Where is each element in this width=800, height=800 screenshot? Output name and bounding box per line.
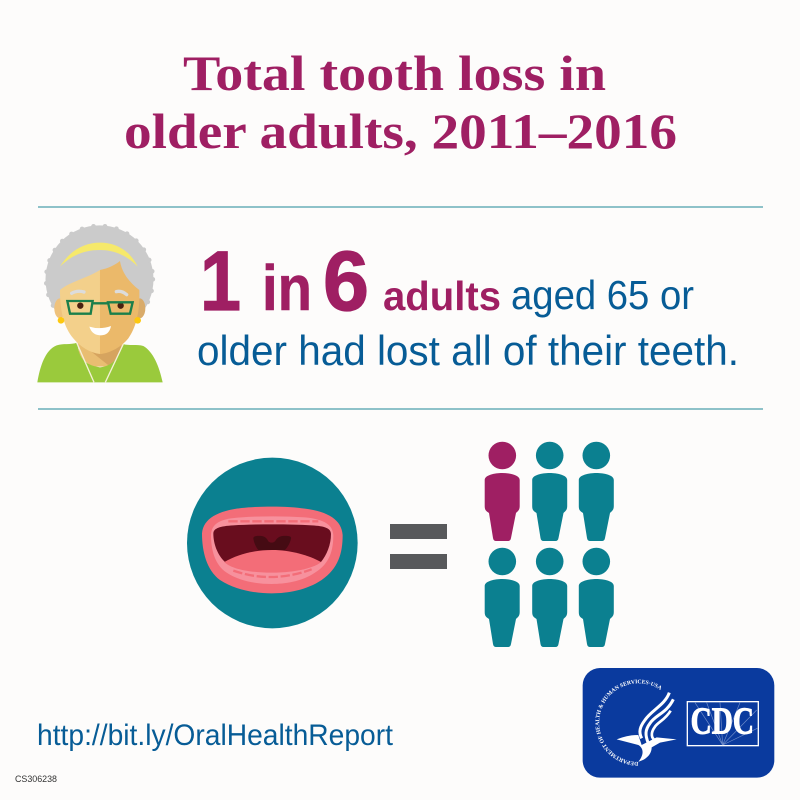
url: http://bit.ly/OralHealthReport <box>37 719 394 752</box>
logo: HHS and CDC: CDC <box>691 701 754 743</box>
statistic text: 6 <box>323 234 369 328</box>
statistic text: adults <box>383 273 501 319</box>
icon: open mouth without teeth <box>187 458 358 628</box>
statistic text: aged 65 or <box>511 272 694 318</box>
icon: older woman with glasses <box>37 225 163 382</box>
statistic text <box>197 234 739 374</box>
title <box>124 45 677 159</box>
title: older adults, 2011–2016 <box>124 103 677 159</box>
logo: HHS and CDC <box>582 668 774 778</box>
statistic text: older had lost all of their teeth. <box>197 327 739 374</box>
person <box>579 442 614 541</box>
statistic text: 1 <box>200 234 241 328</box>
person <box>532 548 567 647</box>
person <box>532 442 567 541</box>
title: Total tooth loss in <box>183 45 606 101</box>
person: highlighted <box>485 442 520 541</box>
code: CS306238 <box>15 774 57 784</box>
icon group: 1 of 6 people highlighted <box>485 442 614 647</box>
statistic text: in <box>262 252 312 324</box>
person <box>485 548 520 647</box>
equals sign <box>390 524 447 569</box>
person <box>579 548 614 647</box>
logo: HHS and CDC: DEPARTMENT OF HEALTH & HUMAN SERVICES·USA <box>595 680 661 766</box>
